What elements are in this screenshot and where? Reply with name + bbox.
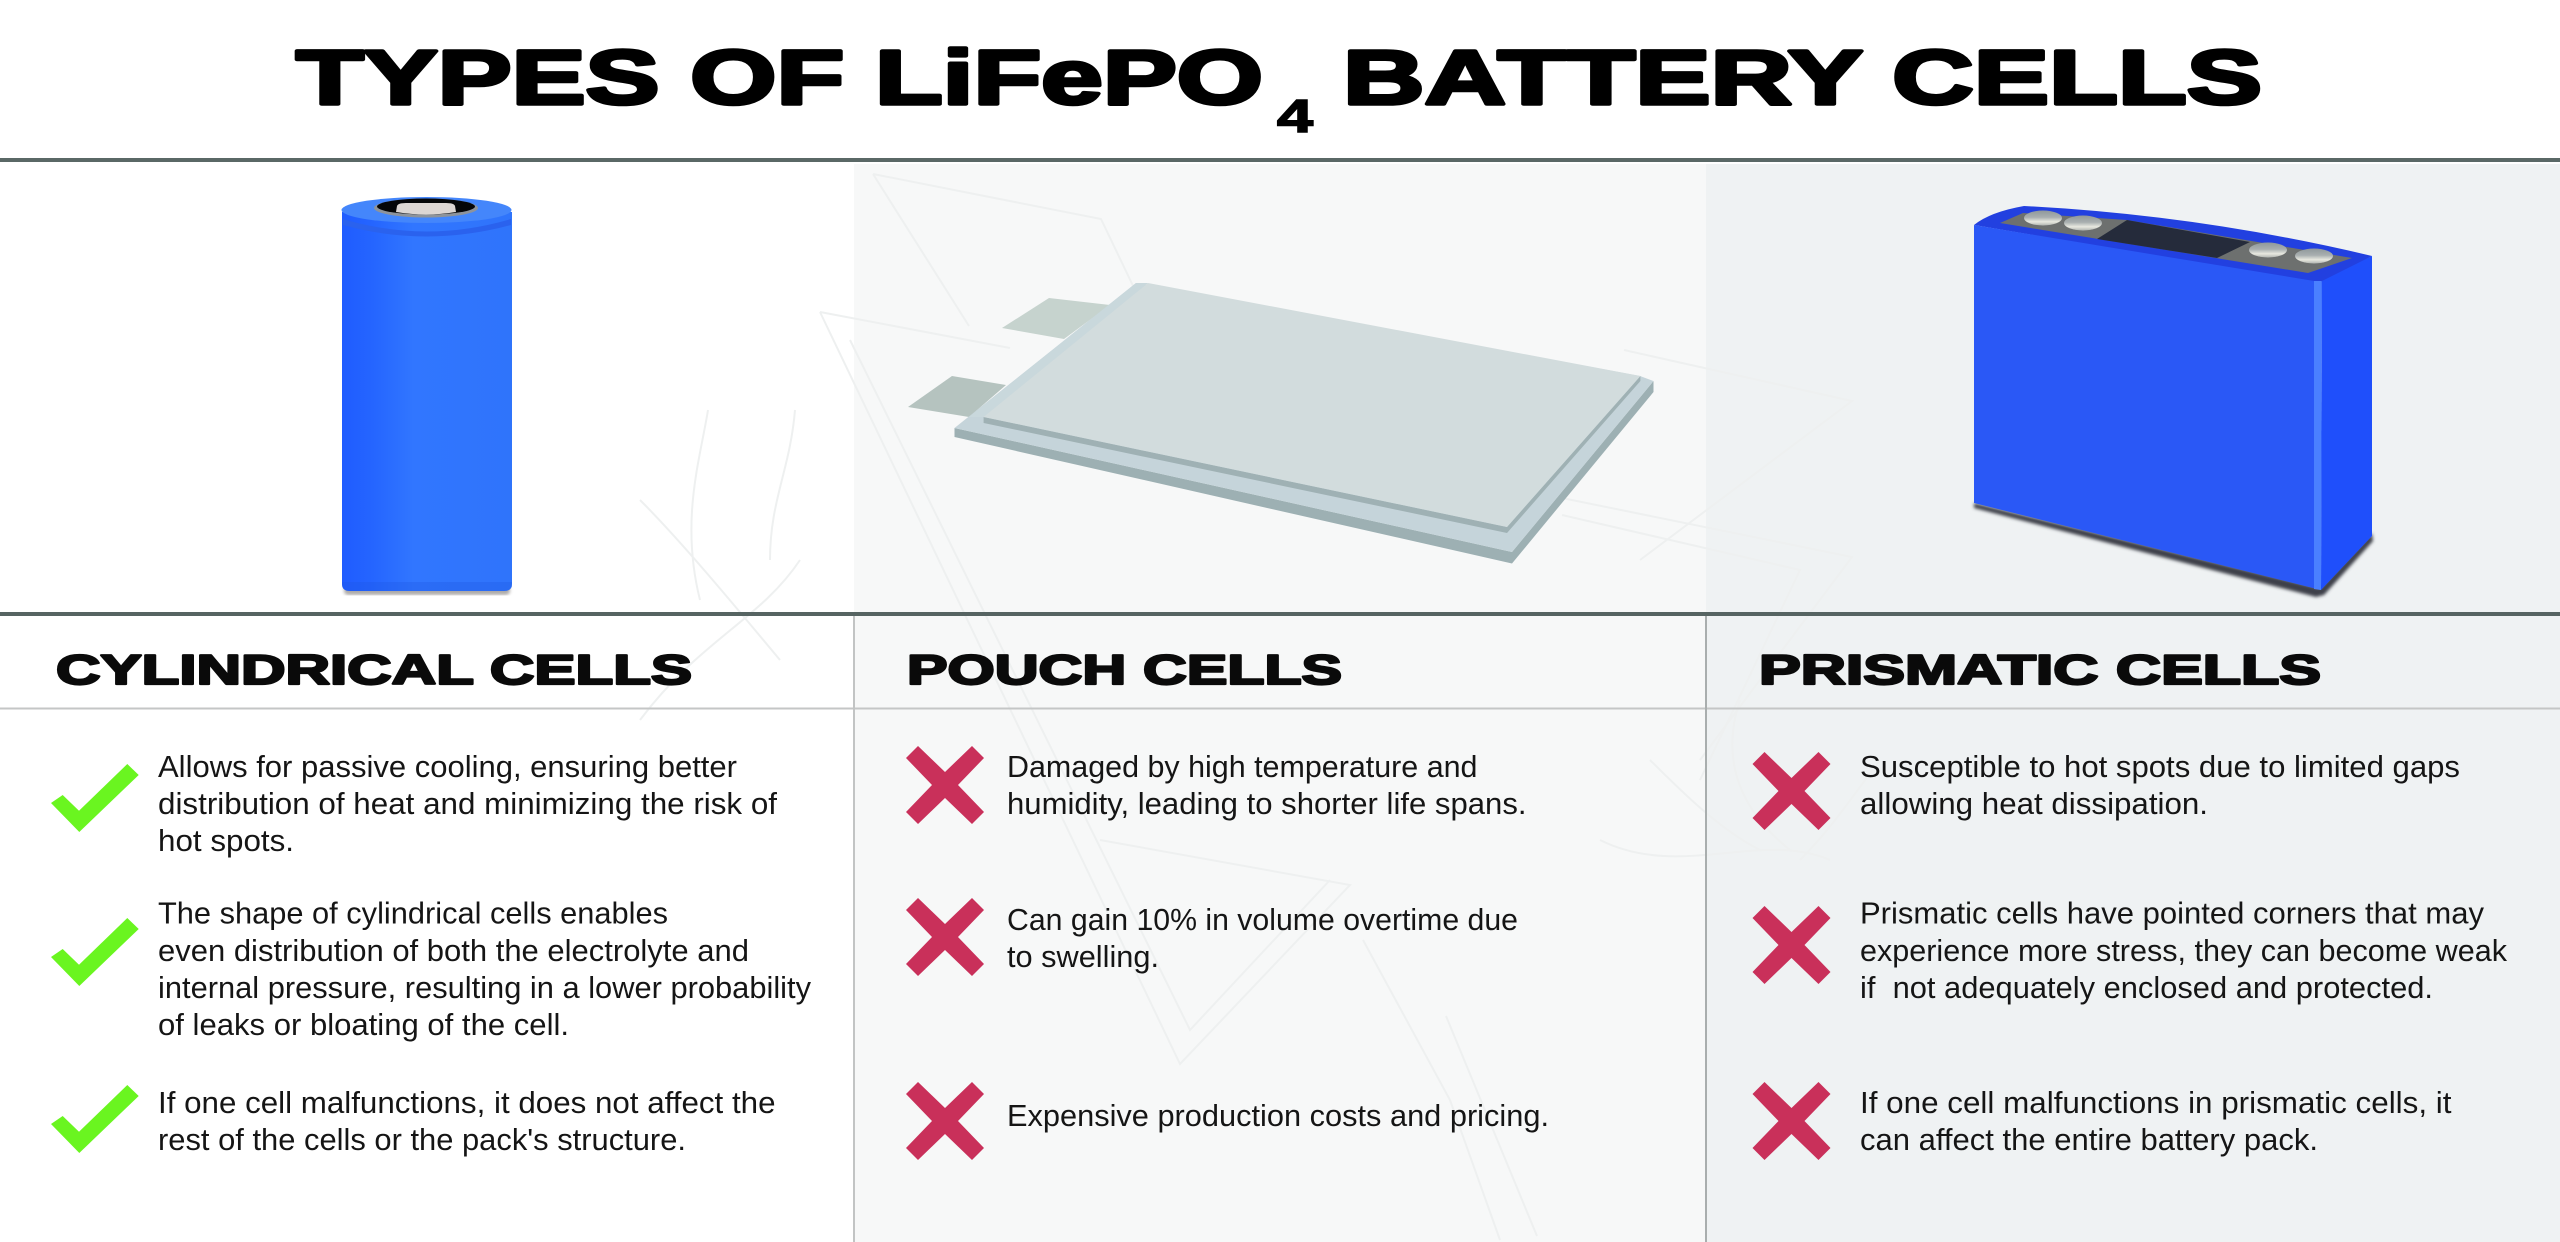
heading: prismatic cells: PRISMATIC CELLS [1759, 646, 2321, 693]
cylindrical point 2: The shape of cylindrical cells enables [158, 896, 668, 930]
illustration: prismatic cell [1974, 206, 2373, 597]
cylindrical point 1: distribution of heat and minimizing the risk of [158, 787, 778, 821]
divider: column two and three [1705, 616, 1707, 1242]
divider: image row rule [0, 612, 2560, 616]
cylindrical point 3: rest of the cells or the pack's structure. [158, 1123, 686, 1157]
prismatic point 2 [1860, 896, 2508, 1005]
panel: cylindrical cells [51, 646, 812, 1157]
prismatic point 3: If one cell malfunctions in prismatic cells, it [1860, 1086, 2452, 1120]
cylindrical point 1: Allows for passive cooling, ensuring better [158, 750, 737, 784]
background watermark [640, 174, 1880, 1240]
pouch point 1: Damaged by high temperature and [1007, 750, 1478, 784]
cross icon 2 [1752, 906, 1830, 984]
pouch point 2: to swelling. [1007, 940, 1159, 974]
divider: header rule [0, 158, 2560, 162]
prismatic point 2: Prismatic cells have pointed corners that may [1860, 896, 2485, 930]
cross icon 1 [1752, 752, 1830, 830]
cylindrical point 3: If one cell malfunctions, it does not affect the [158, 1086, 776, 1120]
prismatic point 3 [1860, 1086, 2452, 1157]
pouch point 2 [1007, 903, 1518, 974]
cross icon 3 [1752, 1082, 1830, 1160]
pouch point 1 [1007, 750, 1526, 821]
illustration: cylindrical cell [342, 197, 512, 595]
pouch point 2: Can gain 10% in volume overtime due [1007, 903, 1518, 937]
prismatic point 1: Susceptible to hot spots due to limited gaps [1860, 750, 2460, 784]
prismatic point 3: can affect the entire battery pack. [1860, 1123, 2318, 1157]
title: BATTERY CELLS [1343, 35, 2262, 121]
cylindrical point 3 [158, 1086, 776, 1157]
illustration: pouch cell [908, 283, 1654, 564]
pouch tab lower [908, 376, 1006, 417]
check icon 2 [51, 918, 139, 986]
terminals [2024, 210, 2333, 264]
pouch point 3: Expensive production costs and pricing. [1007, 1099, 1549, 1133]
cross icon 3 [906, 1082, 984, 1160]
title [296, 35, 2262, 142]
panel: pouch cells [906, 646, 1549, 1160]
pouch tab upper [1002, 298, 1110, 339]
title: 4 [1277, 90, 1314, 142]
heading: cylindrical cells: CYLINDRICAL CELLS [56, 646, 692, 693]
panel: prismatic cells [1752, 646, 2508, 1160]
title: TYPES OF LiFePO [296, 35, 1263, 121]
divider: column one and two [853, 616, 855, 1242]
check icon 1 [51, 764, 139, 832]
prismatic point 1 [1860, 750, 2460, 821]
cylindrical point 1 [158, 750, 778, 858]
divider: subheading rule [0, 708, 2560, 710]
panel background: prismatic column [1706, 164, 2560, 1242]
prismatic point 2: if not adequately enclosed and protected. [1860, 971, 2433, 1005]
panel background: pouch column [854, 164, 1706, 1242]
prismatic point 1: allowing heat dissipation. [1860, 787, 2208, 821]
cross icon 1 [906, 746, 984, 824]
cylindrical point 2: internal pressure, resulting in a lower probability [158, 971, 812, 1005]
cylindrical point 2: even distribution of both the electrolyte and [158, 934, 749, 968]
cylindrical point 2 [158, 896, 812, 1042]
prismatic point 2: experience more stress, they can become weak [1860, 934, 2508, 968]
cylindrical point 1: hot spots. [158, 824, 294, 858]
pouch point 1: humidity, leading to shorter life spans. [1007, 787, 1526, 821]
cylindrical point 2: of leaks or bloating of the cell. [158, 1008, 569, 1042]
cross icon 2 [906, 898, 984, 976]
heading: pouch cells: POUCH CELLS [907, 646, 1342, 693]
check icon 3 [51, 1085, 139, 1153]
